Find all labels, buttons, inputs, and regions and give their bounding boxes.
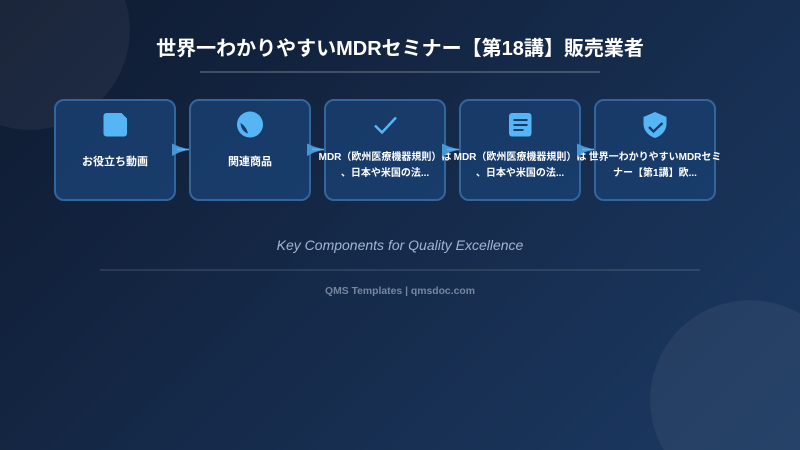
label: card 1: お役立ち動画 <box>82 156 148 168</box>
label: card 3: 、日本や米国の法... <box>341 168 429 179</box>
label: card 4: MDR（欧州医療機器規則）は <box>454 152 586 163</box>
label: card 5: ナー【第1講】欧... <box>613 168 697 179</box>
arrow 1 <box>172 144 189 156</box>
label: card 2: 関連商品 <box>228 156 272 168</box>
decorative circle: top left <box>0 0 130 130</box>
icon: globe disc <box>237 112 263 138</box>
subtitle: Key Components for Quality Excellence <box>277 237 523 253</box>
icon: check mark <box>374 116 397 134</box>
panel: card 3 <box>324 99 446 201</box>
panel: card 5 <box>594 99 716 201</box>
title underline <box>200 71 600 73</box>
label: card 5: 世界一わかりやすいMDRセミ <box>589 152 721 163</box>
label: card 4: 、日本や米国の法... <box>476 168 564 179</box>
panel: card 4 <box>459 99 581 201</box>
footer divider <box>100 269 700 271</box>
label: card 5 <box>589 151 721 179</box>
panel: card 2 <box>189 99 311 201</box>
icon: article <box>509 113 532 136</box>
title: 世界一わかりやすいMDRセミナー【第18講】販売業者 <box>156 38 644 60</box>
icon: shield check <box>644 112 666 138</box>
arrow 3 <box>442 144 459 156</box>
label: card 3: MDR（欧州医療機器規則）は <box>319 152 451 163</box>
icon: document <box>104 113 127 136</box>
arrow 4 <box>577 144 594 156</box>
decorative circle: bottom right <box>650 300 800 450</box>
panel: card 1 <box>54 99 176 201</box>
footer text: QMS Templates | qmsdoc.com <box>325 286 475 297</box>
label: card 3 <box>319 151 451 179</box>
label: card 4 <box>454 151 586 179</box>
arrow 2 <box>307 144 324 156</box>
